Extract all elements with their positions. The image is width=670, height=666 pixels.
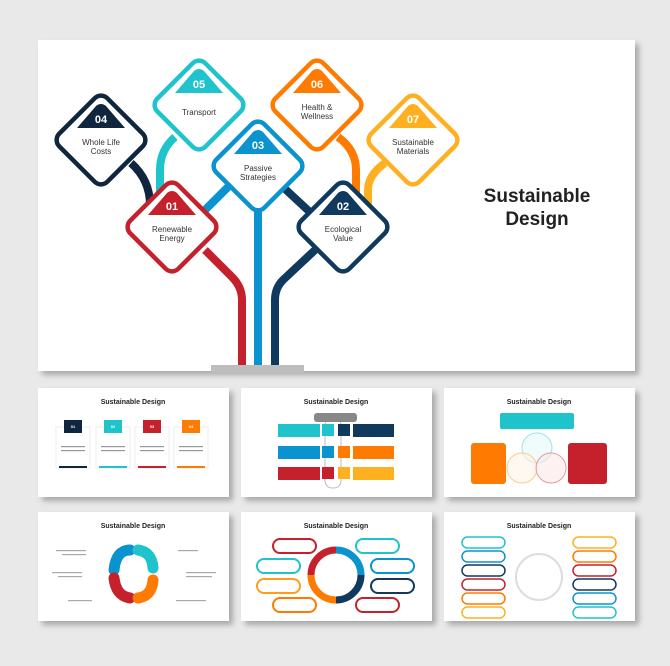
diamond 06 [269, 57, 365, 153]
diamond 06: Health & [302, 103, 333, 112]
thumbnail 2: process flow [241, 388, 432, 497]
diamond 04: Whole Life [82, 138, 120, 147]
diamond 06: Wellness [301, 112, 333, 121]
diamond 02: 02 [337, 201, 349, 213]
thumbnail 6: circle with pill list: Sustainable Design [507, 523, 571, 530]
diamond 02: Value [333, 234, 353, 243]
diamond 02: Ecological [325, 225, 361, 234]
thumbnail 1: numbered cards: Sustainable Design [101, 399, 165, 406]
thumbnail 6: circle with pill list [444, 512, 635, 621]
diamond 05: Transport [182, 108, 217, 117]
diamond 04 [53, 92, 149, 188]
diamond 05: 05 [193, 79, 205, 91]
diamond 03: Passive [244, 164, 273, 173]
thumbnail 3: venn [444, 388, 635, 497]
thumbnail 2: process flow: Sustainable Design [304, 399, 368, 406]
diamond 06: 06 [311, 79, 323, 91]
diamond 03: Strategies [240, 173, 276, 182]
base [211, 365, 304, 373]
diamond 03 [210, 118, 306, 214]
thumbnail 4: petals: Sustainable Design [101, 523, 165, 530]
title: Design [505, 209, 569, 230]
diamond 07: 07 [407, 114, 419, 126]
diamond 03: 03 [252, 140, 264, 152]
thumbnail 3: venn: Sustainable Design [507, 399, 571, 406]
diamond 07 [365, 92, 461, 188]
thumbnail 1: numbered cards: 04 [189, 424, 194, 429]
thumbnail 1: numbered cards: 03 [150, 424, 155, 429]
diamond 07: Materials [397, 147, 429, 156]
diamond 04: 04 [95, 114, 108, 126]
diamond 01: Renewable [152, 225, 193, 234]
thumbnail 5: ring with pills [241, 512, 432, 621]
thumbnail 1: numbered cards: 01 [71, 424, 76, 429]
diamond 01: Energy [159, 234, 185, 243]
diamond 04: Costs [91, 147, 111, 156]
diamond 07: Sustainable [392, 138, 434, 147]
thumbnail 4: petals [38, 512, 229, 621]
diamond 01 [124, 179, 220, 275]
thumbnail 1: numbered cards [38, 388, 229, 497]
thumbnail 5: ring with pills: Sustainable Design [304, 523, 368, 530]
diamond 01: 01 [166, 201, 178, 213]
diamond 02 [295, 179, 391, 275]
main slide [38, 40, 635, 373]
title: Sustainable [484, 186, 590, 207]
title [484, 186, 590, 230]
diamond 05 [151, 57, 247, 153]
stems [131, 137, 385, 366]
thumbnail 1: numbered cards: 02 [111, 424, 116, 429]
